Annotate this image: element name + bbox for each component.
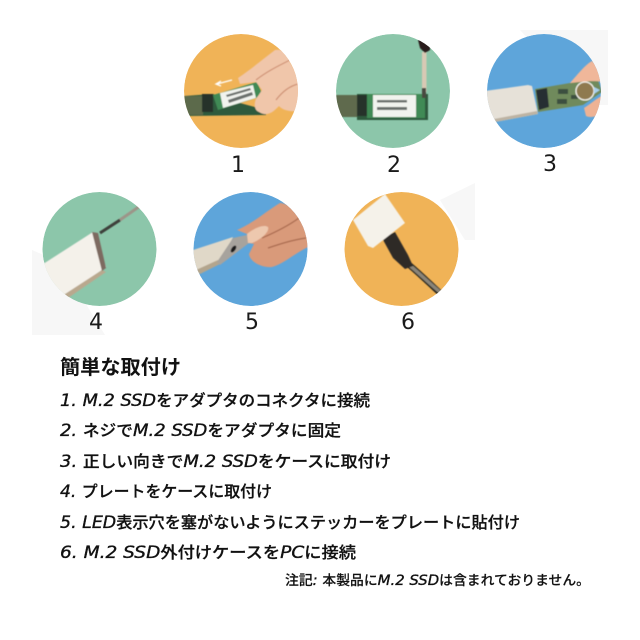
backdrop: faint grey shadow shapes: [32, 30, 608, 335]
case: [353, 194, 405, 248]
case body: [194, 236, 234, 274]
number 1: 1: [231, 153, 245, 178]
LED hole: [230, 245, 237, 253]
plate edge: [92, 232, 106, 271]
cable: [408, 264, 440, 293]
hand: [238, 50, 300, 114]
adapter board: [336, 95, 357, 117]
number 6: 6: [401, 310, 415, 335]
note: 注記: 本製品にM.2 SSDは含まれておりません。: [285, 572, 590, 589]
step 6: connect case to PC: [344, 192, 458, 306]
case body: [44, 232, 106, 294]
step 1: insert SSD into adapter connector: [184, 34, 300, 148]
instruction 3: 3. 正しい向きで M.2 SSD をケースに取付け: [60, 452, 391, 472]
connector: [202, 94, 213, 112]
step 2: fix SSD with screw: [336, 34, 450, 148]
step 5: apply sticker to plate: [190, 192, 310, 306]
instruction 4: 4. プレートをケースに取付け: [60, 482, 272, 502]
fingers: [570, 61, 606, 83]
screwdriver: [100, 220, 120, 233]
USB plug: [382, 232, 413, 269]
number 3: 3: [543, 152, 557, 177]
step 3: insert SSD in case: [485, 34, 606, 148]
adapter board: [184, 94, 266, 116]
instruction 2: 2. ネジでM.2 SSD をアダプタに固定: [60, 421, 341, 441]
instruction 1: 1. M.2 SSD をアダプタのコネクタに接続: [60, 391, 370, 411]
SSD label: [367, 94, 425, 118]
hand: [237, 203, 310, 267]
heading: 簡単な取付け: [60, 351, 181, 380]
plate: [217, 235, 249, 265]
SSD board: [535, 77, 602, 112]
number 5: 5: [245, 310, 259, 335]
number 4: 4: [89, 310, 103, 335]
SSD card: [213, 82, 263, 110]
case: [485, 85, 538, 122]
arrow: [216, 80, 232, 86]
screwdriver: [422, 52, 426, 92]
connector: [536, 88, 549, 110]
connector: [357, 95, 367, 116]
instruction 6: 6. M.2 SSD 外付けケースを PCに接続: [60, 543, 356, 563]
number 2: 2: [387, 153, 401, 178]
step 4: attach plate to case: [40, 192, 156, 306]
highlight ring: [576, 82, 594, 100]
instruction 5: 5. LED表示穴を塞がないようにステッカーをプレートに貼付け: [60, 513, 520, 533]
